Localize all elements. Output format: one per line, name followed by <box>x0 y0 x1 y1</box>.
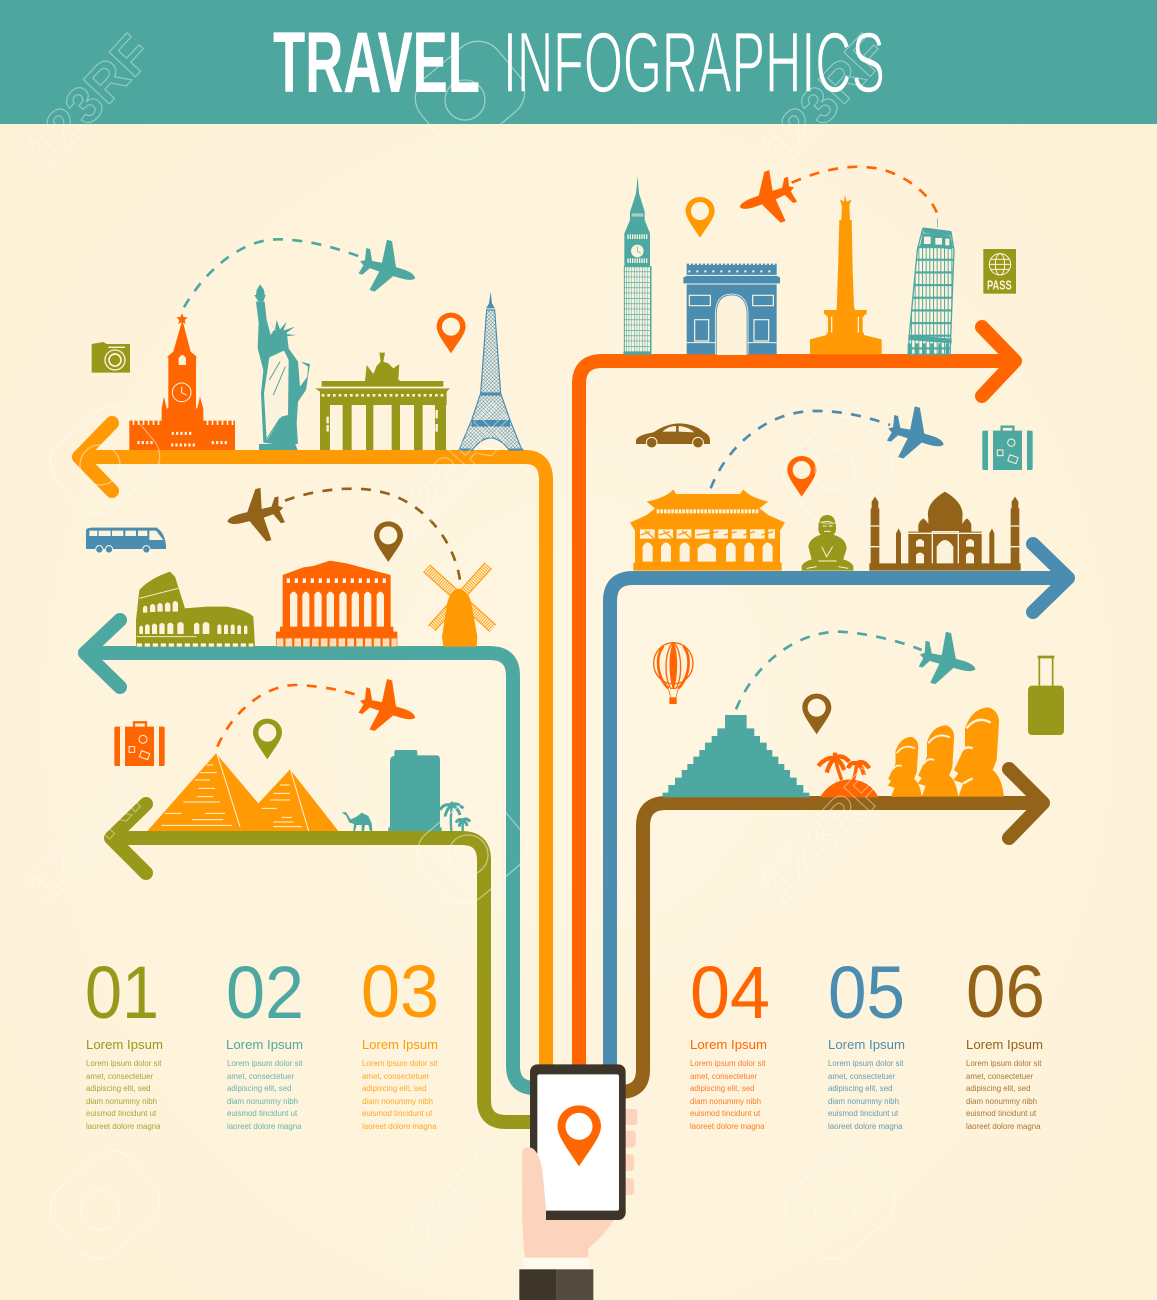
plane blue <box>881 401 952 468</box>
red-orange route with right arrow <box>579 327 1015 1075</box>
flight path red <box>217 685 362 747</box>
plane teal <box>353 234 424 302</box>
column 03: amet, consectetuer <box>362 1072 429 1081</box>
icon: pin brown <box>802 694 831 734</box>
column 04: laoreet dolore magna <box>690 1122 765 1131</box>
icon: suitcase red <box>114 722 165 766</box>
column 01: Lorem Ipsum <box>86 1037 163 1052</box>
stock watermark: 123RF <box>14 24 163 178</box>
teal route with left arrow <box>85 620 535 1088</box>
column 05: diam nonummy nibh <box>828 1097 899 1106</box>
column 01: laoreet dolore magna <box>86 1122 161 1131</box>
jacket sleeve <box>519 1269 593 1300</box>
icon: suitcase teal <box>982 427 1033 470</box>
route lines and arrows <box>79 327 1068 1122</box>
stock watermark: 123RF <box>749 759 898 913</box>
monument block teal <box>388 750 442 831</box>
column 05: Lorem ipsum dolor sit <box>828 1059 904 1068</box>
icon: pin olive <box>253 719 282 759</box>
icon: car <box>636 423 710 448</box>
stock watermark: 123RF <box>14 759 163 913</box>
icon: pin brown <box>374 521 403 562</box>
column 01: amet, consectetuer <box>86 1072 153 1081</box>
column 04 <box>690 951 770 1131</box>
Tower of Pisa <box>908 218 954 354</box>
Parthenon <box>276 561 397 647</box>
column 06: diam nonummy nibh <box>966 1097 1037 1106</box>
column 01 <box>85 951 163 1131</box>
landmark row 4: Big Ben, Arc de Triomphe, Victory Column, Pisa <box>623 164 1016 354</box>
column 02: amet, consectetuer <box>227 1072 294 1081</box>
windmill <box>423 563 496 647</box>
icon: passport: PASS <box>987 278 1012 293</box>
brown route with right arrow <box>620 769 1043 1092</box>
column 06: adipiscing elit, sed <box>966 1084 1030 1093</box>
column 05: laoreet dolore magna <box>828 1122 903 1131</box>
palm and thumb <box>522 1147 614 1258</box>
Buddha <box>802 515 853 571</box>
column 01: 01 <box>85 951 159 1034</box>
column 04: adipiscing elit, sed <box>690 1084 754 1093</box>
Eiffel Tower <box>458 292 523 451</box>
icon: pin red <box>437 313 466 353</box>
icon: hot air balloon <box>654 643 693 704</box>
column 05: 05 <box>828 951 905 1034</box>
column 03 <box>361 950 439 1131</box>
icon: passport <box>983 249 1016 294</box>
column 05 <box>828 951 905 1131</box>
moai heads <box>888 707 1004 797</box>
column 06 <box>966 950 1045 1131</box>
Chinese palace <box>630 489 785 571</box>
phone <box>530 1064 626 1220</box>
hand holding phone <box>519 1064 637 1300</box>
column 03: laoreet dolore magna <box>362 1122 437 1131</box>
stock watermark: 123RF <box>379 1129 528 1283</box>
column 06: laoreet dolore magna <box>966 1122 1041 1131</box>
icon: pin orange <box>686 197 715 238</box>
column 02: diam nonummy nibh <box>227 1097 298 1106</box>
column 06: 06 <box>966 950 1045 1033</box>
orange route with left arrow <box>79 423 546 1075</box>
Colosseum <box>136 572 255 647</box>
stock watermark: 123RF <box>749 24 898 178</box>
plane red <box>353 673 424 741</box>
Big Ben <box>623 176 651 354</box>
flight path blue <box>711 411 890 488</box>
icon: pin red <box>787 456 816 497</box>
column 01: euismod tincidunt ut <box>86 1109 157 1118</box>
pyramids <box>147 753 338 831</box>
column 06: amet, consectetuer <box>966 1072 1033 1081</box>
column 06: Lorem Ipsum <box>966 1037 1043 1052</box>
blue route with right arrow <box>610 544 1068 1075</box>
column 01: diam nonummy nibh <box>86 1097 157 1106</box>
Arc de Triomphe <box>683 265 780 354</box>
plane orange <box>731 164 804 234</box>
palm island <box>818 753 878 797</box>
header band <box>0 0 1157 124</box>
column 03: diam nonummy nibh <box>362 1097 433 1106</box>
column 02: 02 <box>226 951 304 1034</box>
fingers <box>623 1109 637 1195</box>
column 04: Lorem ipsum dolor sit <box>690 1059 766 1068</box>
column 05: Lorem Ipsum <box>828 1037 905 1052</box>
column 04: diam nonummy nibh <box>690 1097 761 1106</box>
camel <box>342 812 372 831</box>
numbered text columns <box>85 950 1045 1131</box>
plane teal <box>913 627 983 693</box>
column 04: euismod tincidunt ut <box>690 1109 761 1118</box>
stock watermark <box>14 24 905 1283</box>
title: TRAVEL <box>273 15 480 111</box>
title: INFOGRAPHICS <box>503 15 885 111</box>
Victory Column <box>810 195 882 354</box>
column 02: adipiscing elit, sed <box>227 1084 291 1093</box>
column 03: adipiscing elit, sed <box>362 1084 426 1093</box>
flight path orange <box>792 167 937 214</box>
column 04: Lorem Ipsum <box>690 1037 767 1052</box>
column 01: adipiscing elit, sed <box>86 1084 150 1093</box>
column 03: Lorem ipsum dolor sit <box>362 1059 438 1068</box>
column 03: 03 <box>361 950 439 1033</box>
column 02: Lorem Ipsum <box>226 1037 303 1052</box>
icon: trolley bag <box>1028 656 1064 735</box>
column 04: 04 <box>690 951 770 1034</box>
column 06: Lorem ipsum dolor sit <box>966 1059 1042 1068</box>
column 06: euismod tincidunt ut <box>966 1109 1037 1118</box>
landmark row 1: Kremlin, Liberty, Brandenburg, Eiffel <box>92 234 523 451</box>
Mayan pyramid <box>663 715 809 797</box>
flight path teal <box>184 239 358 307</box>
olive route with left arrow <box>111 804 535 1122</box>
column 05: amet, consectetuer <box>828 1072 895 1081</box>
icon: bus <box>86 528 166 553</box>
Kremlin tower <box>129 313 235 450</box>
title <box>273 15 885 111</box>
icon: camera <box>92 342 130 373</box>
column 01: Lorem ipsum dolor sit <box>86 1059 162 1068</box>
column 02: Lorem ipsum dolor sit <box>227 1059 303 1068</box>
column 02 <box>226 951 304 1131</box>
stock watermark: 123RF <box>379 394 528 548</box>
column 02: laoreet dolore magna <box>227 1122 302 1131</box>
column 04: amet, consectetuer <box>690 1072 757 1081</box>
column 03: euismod tincidunt ut <box>362 1109 433 1118</box>
landmark rows 2 and 3: Colosseum, Parthenon, windmill, pyramids <box>86 484 496 831</box>
shirt cuff <box>523 1258 589 1269</box>
palm trees teal <box>440 802 470 831</box>
Statue of Liberty <box>254 284 310 450</box>
column 05: adipiscing elit, sed <box>828 1084 892 1093</box>
Brandenburg Gate <box>315 353 450 450</box>
column 02: euismod tincidunt ut <box>227 1109 298 1118</box>
Taj Mahal <box>869 485 1021 571</box>
plane brown <box>221 484 290 549</box>
landmark rows 5 and 6: palace, Buddha, Taj Mahal, Mayan pyramid, moai <box>630 401 1064 797</box>
flight path teal <box>736 632 922 709</box>
column 03: Lorem Ipsum <box>362 1037 438 1052</box>
column 05: euismod tincidunt ut <box>828 1109 899 1118</box>
flight path brown <box>285 489 460 580</box>
